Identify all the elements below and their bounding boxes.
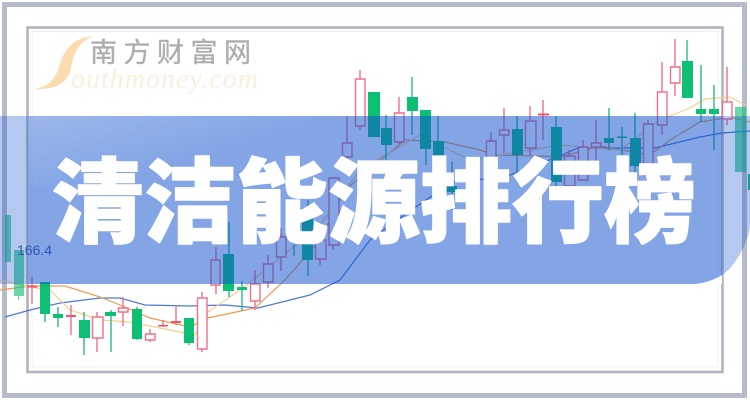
moving average: yellow xyxy=(0,97,745,335)
title: 清洁能源排行榜 xyxy=(52,129,696,262)
icon: S swoosh xyxy=(35,36,93,89)
price label: 166.4 xyxy=(17,242,52,258)
candle bodies: green xyxy=(40,61,750,343)
band: sheen xyxy=(29,116,449,186)
candle wicks: red xyxy=(32,39,727,352)
inner hairline frame xyxy=(32,32,718,367)
candle bodies: red solid xyxy=(27,114,549,326)
band: right rounded end xyxy=(722,116,750,275)
title band xyxy=(0,116,750,284)
corner cut-out xyxy=(692,275,722,284)
candle bodies: red hollow xyxy=(92,67,732,349)
moving average: orange xyxy=(0,117,750,327)
logo domain: outhmoney.com xyxy=(71,64,259,95)
band: left margin xyxy=(0,116,29,284)
inner frame xyxy=(28,28,722,372)
logo Chinese name: 南方财富网 xyxy=(90,31,258,70)
candle wicks: green xyxy=(45,40,714,355)
candlestick chart xyxy=(0,39,750,355)
band: centre xyxy=(29,116,722,284)
faded candles at the margins xyxy=(5,107,746,300)
moving average: blue xyxy=(5,131,750,317)
logo: southmoney xyxy=(35,31,259,95)
